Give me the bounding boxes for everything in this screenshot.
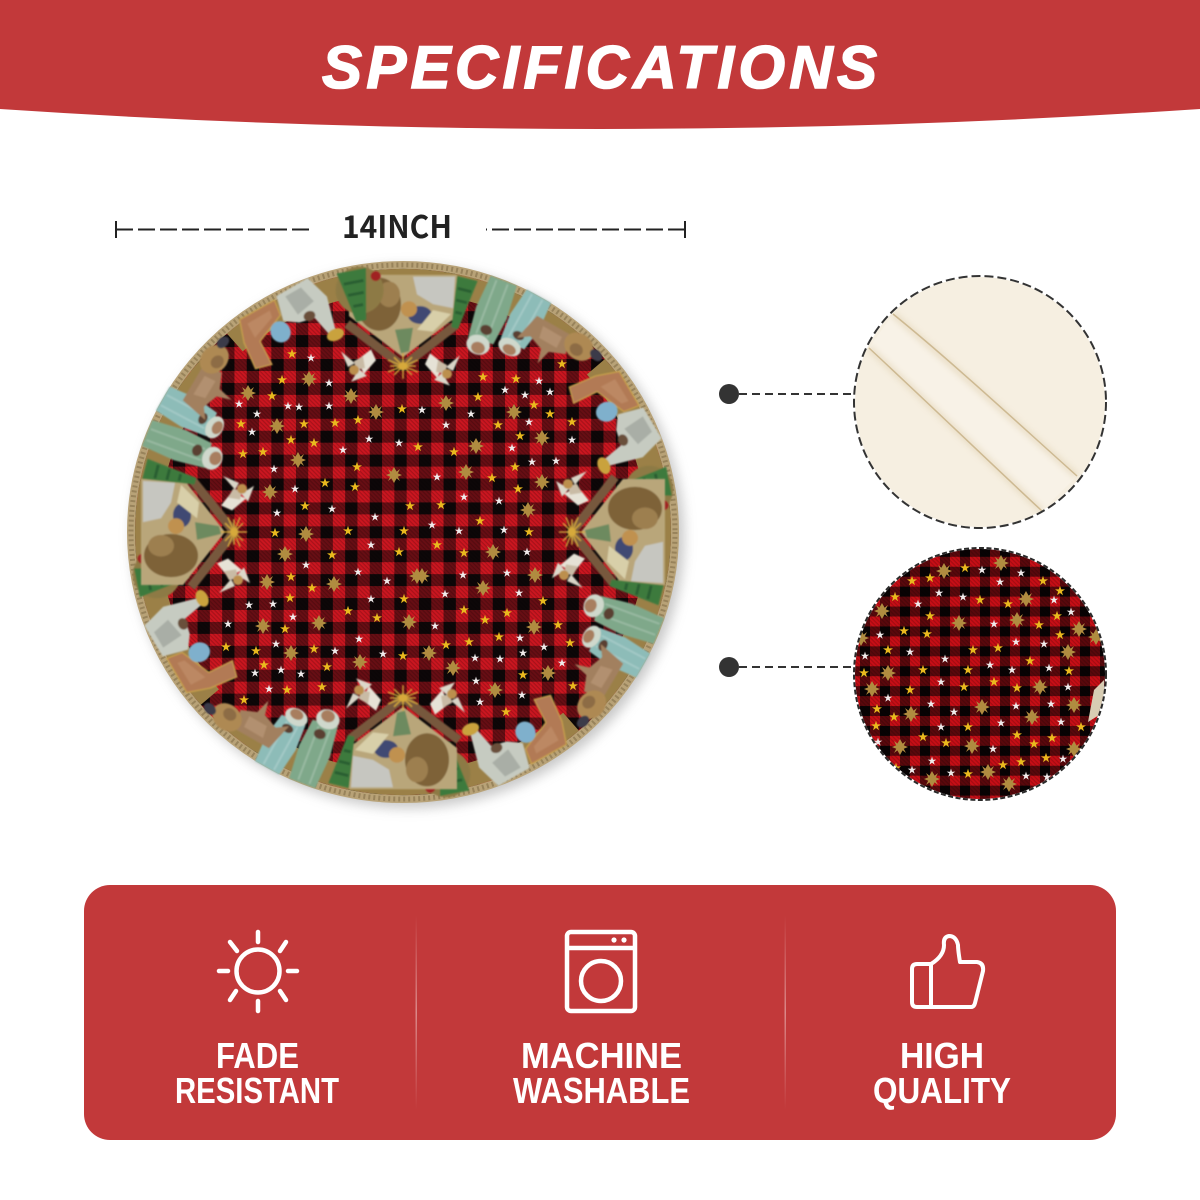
feature label: fade resistant: FADE — [216, 1035, 299, 1076]
callout dot and leader — [719, 657, 854, 677]
callout: linen backing — [719, 272, 1110, 532]
title: SPECIFICATIONS — [322, 34, 877, 101]
dimension line: 14 inch — [116, 202, 685, 247]
border scene: top quarter — [341, 275, 677, 517]
feature label: high quality: QUALITY — [873, 1070, 1011, 1111]
panel: features — [84, 885, 1116, 1140]
plaid fabric circle — [850, 544, 1110, 804]
dimension line: 14 inch: 14INCH — [342, 202, 452, 247]
round tree skirt product — [129, 263, 684, 808]
feature label: machine washable — [513, 1035, 690, 1111]
feature label: high quality: HIGH — [900, 1035, 984, 1076]
header banner — [0, 0, 1200, 129]
feature label: fade resistant — [175, 1035, 339, 1111]
border scene: left quarter — [141, 263, 387, 593]
callout dot and leader — [719, 384, 854, 404]
callout: plaid front — [719, 544, 1110, 804]
icon: washing machine — [567, 932, 635, 1011]
border scene: bottom quarter — [129, 547, 465, 789]
feature label: fade resistant: RESISTANT — [175, 1070, 339, 1111]
feature label: machine washable: MACHINE — [521, 1035, 682, 1076]
icon: sun — [219, 932, 297, 1011]
linen fabric circle — [850, 272, 1110, 532]
feature label: machine washable: WASHABLE — [513, 1070, 690, 1111]
border scene: right quarter — [419, 471, 665, 801]
gold glitter band — [131, 265, 675, 799]
feature label: high quality — [873, 1035, 1011, 1111]
icon: thumbs up — [912, 936, 983, 1007]
scattered stars on plaid — [221, 349, 578, 716]
